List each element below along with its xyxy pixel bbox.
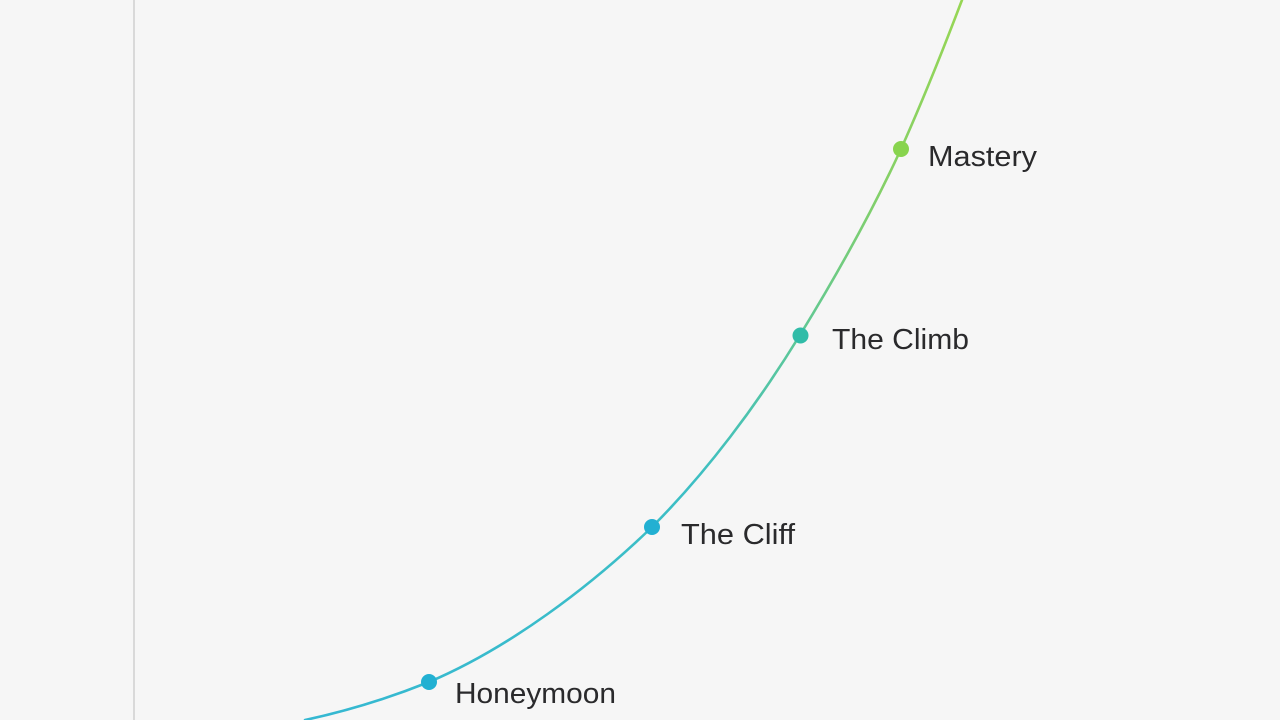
vertical axis — [133, 0, 135, 720]
stage: Honeymoon: Honeymoon — [455, 678, 616, 710]
growth curve — [305, 0, 962, 720]
stage: The Climb: The Climb — [832, 324, 969, 356]
stage: Mastery: Mastery — [928, 141, 1038, 173]
stage: The Cliff: The Cliff — [681, 519, 796, 551]
